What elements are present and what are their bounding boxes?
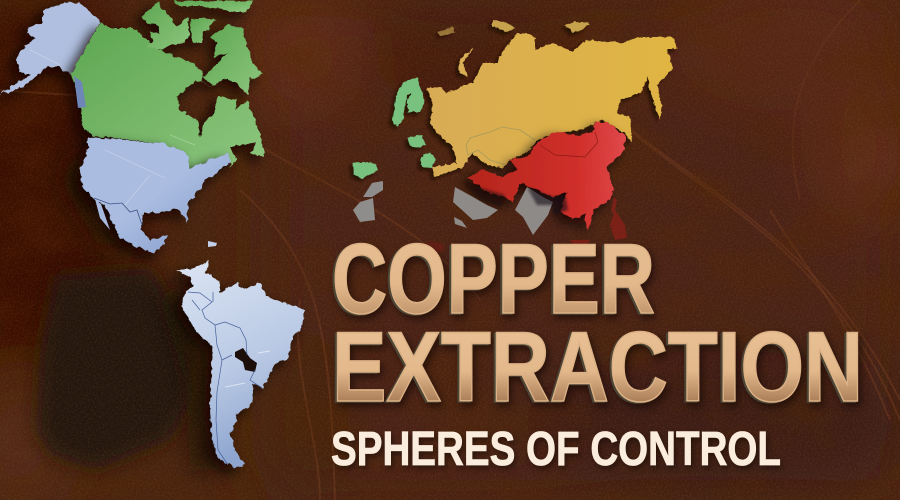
dark oil patch	[36, 268, 192, 470]
region: Scandinavia	[392, 77, 425, 127]
region: Central Europe	[408, 135, 425, 148]
shadow: Pakistan	[465, 183, 505, 208]
region: Spain	[353, 162, 378, 178]
region: Iran	[453, 187, 498, 220]
borders: South American countries	[188, 292, 262, 465]
streaks: metal scratches	[30, 50, 195, 205]
region: India	[515, 187, 553, 235]
red smudge near title	[418, 242, 444, 254]
borders: Mongolia	[540, 132, 598, 157]
region: Southeast Asia	[570, 197, 627, 247]
region: Baja California	[95, 199, 110, 230]
region: Africa grey west	[363, 181, 383, 197]
panel: South America map	[177, 261, 305, 468]
region: Russia and Central Asia	[427, 33, 677, 177]
region: Balkans	[420, 152, 436, 168]
region: South America	[177, 261, 305, 468]
region: Pacific coast detail	[74, 76, 86, 108]
border: US and Mexico	[94, 198, 142, 225]
panel: North America map	[0, 1, 265, 253]
region: Caribbean island	[208, 241, 217, 247]
region: China and allies	[467, 122, 625, 230]
region: Arctic islands	[438, 20, 590, 36]
subtitle: SPHERES OF CONTROL	[331, 423, 781, 476]
streaks: metal scratches	[225, 351, 270, 387]
region: Alaska	[0, 2, 100, 95]
region: Canada	[71, 1, 265, 168]
region: Novaya Zemlya	[458, 48, 473, 78]
borders: Kazakhstan	[466, 127, 535, 165]
region: Paraguay gap	[235, 348, 257, 372]
dark shadow left of South America	[160, 280, 225, 470]
title: COPPER: COPPER	[332, 223, 655, 334]
region: United States and Mexico	[80, 137, 230, 253]
panel: Eurasia map	[353, 20, 677, 247]
region: Oman	[454, 217, 467, 228]
region: Africa grey south	[353, 198, 375, 222]
shadow: India and Iran	[527, 187, 568, 215]
dark shadow left of North America	[60, 140, 130, 250]
